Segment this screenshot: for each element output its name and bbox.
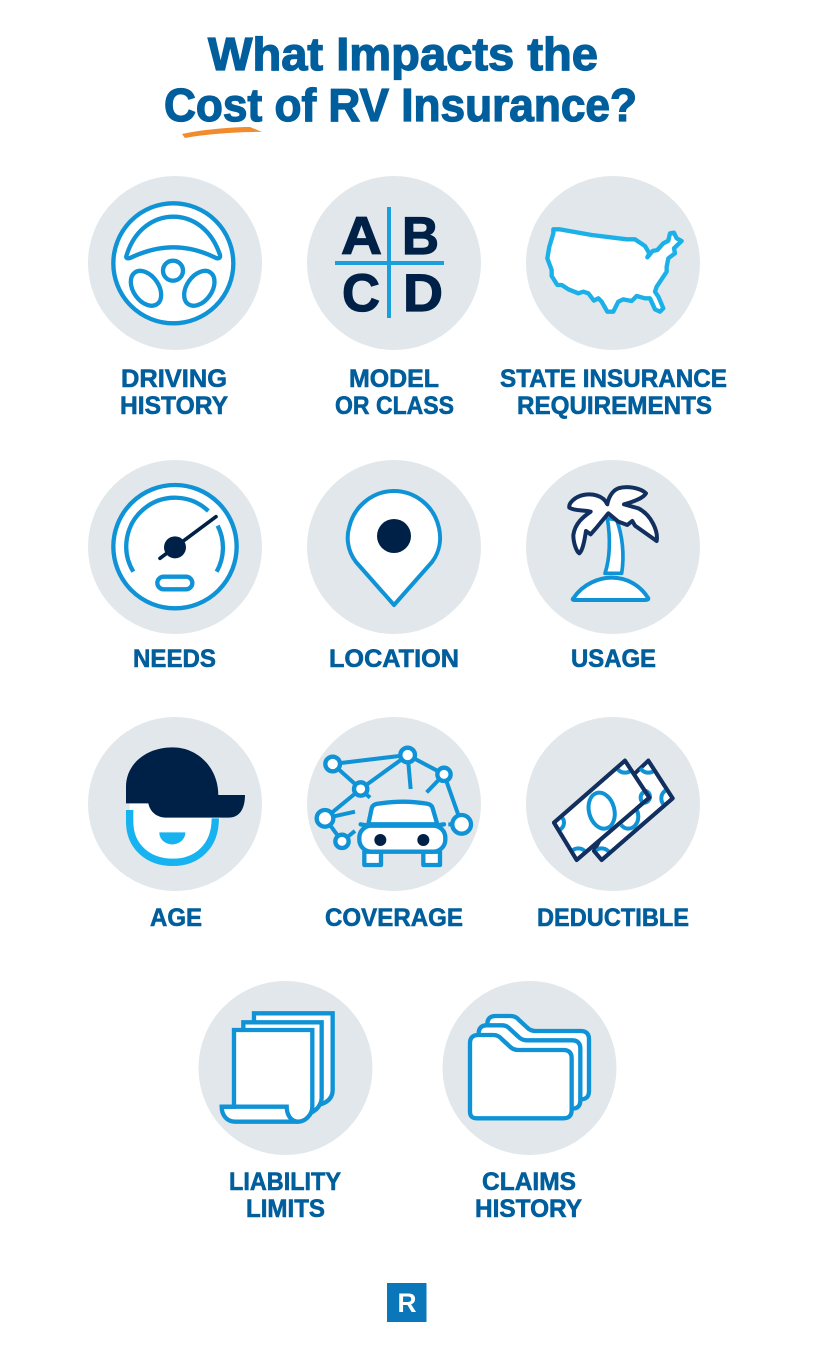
icon: ABCD grid: D xyxy=(403,264,443,323)
icon: speedometer xyxy=(113,485,237,608)
panel: state insurance requirements xyxy=(500,176,727,420)
label: model or class xyxy=(335,365,454,420)
label: claims history: HISTORY xyxy=(475,1195,582,1223)
panel: age xyxy=(88,717,262,932)
label: liability limits: LIABILITY xyxy=(229,1168,341,1196)
label: driving history xyxy=(120,365,228,420)
label: location: LOCATION xyxy=(329,645,459,673)
label: claims history: CLAIMS xyxy=(482,1168,576,1196)
panel: location xyxy=(307,460,481,673)
icon: palm tree island xyxy=(569,487,657,600)
icon: face with cap xyxy=(126,747,245,863)
logo xyxy=(387,1283,426,1322)
icon: map pin xyxy=(348,491,440,605)
label: state insurance requirements xyxy=(500,365,727,420)
label: usage: USAGE xyxy=(571,645,656,673)
label: age: AGE xyxy=(150,904,202,932)
label: needs: NEEDS xyxy=(133,645,216,673)
title: Cost of RV Insurance? xyxy=(164,79,637,131)
title xyxy=(164,28,637,131)
title: What Impacts the xyxy=(208,28,598,80)
panel: deductible xyxy=(526,717,700,932)
icon: ABCD grid: B xyxy=(402,207,439,266)
label: coverage: COVERAGE xyxy=(325,904,463,932)
label: model or class: MODEL xyxy=(349,365,439,393)
icon: stacked documents xyxy=(222,1013,333,1122)
label: deductible: DEDUCTIBLE xyxy=(537,904,689,932)
panel: claims history xyxy=(442,981,616,1223)
label: model or class: OR CLASS xyxy=(335,392,454,420)
icon: car with network xyxy=(317,748,471,865)
icon: map of USA xyxy=(547,229,682,312)
icon: ABCD grid xyxy=(335,207,444,323)
label: claims history xyxy=(475,1168,582,1223)
panel: coverage xyxy=(307,717,481,932)
icon: ABCD grid: A xyxy=(341,207,382,266)
orange underline xyxy=(182,127,262,138)
icon: steering wheel xyxy=(113,203,233,323)
icon: stacked folders xyxy=(470,1016,589,1118)
label: state insurance requirements: REQUIREMENTS xyxy=(517,392,712,420)
label: driving history: HISTORY xyxy=(120,392,228,420)
panel: driving history xyxy=(88,176,262,420)
panel: usage xyxy=(526,460,700,673)
label: liability limits: LIMITS xyxy=(246,1195,325,1223)
icon: ABCD grid: C xyxy=(342,264,380,323)
label: driving history: DRIVING xyxy=(121,365,227,393)
icon: money bills xyxy=(552,758,675,862)
label: state insurance requirements: STATE INSURANCE xyxy=(500,365,727,393)
panel: model or class xyxy=(307,176,481,420)
panel: liability limits xyxy=(198,981,372,1223)
logo: R xyxy=(398,1288,416,1318)
panel: needs xyxy=(88,460,262,673)
label: liability limits xyxy=(229,1168,341,1223)
